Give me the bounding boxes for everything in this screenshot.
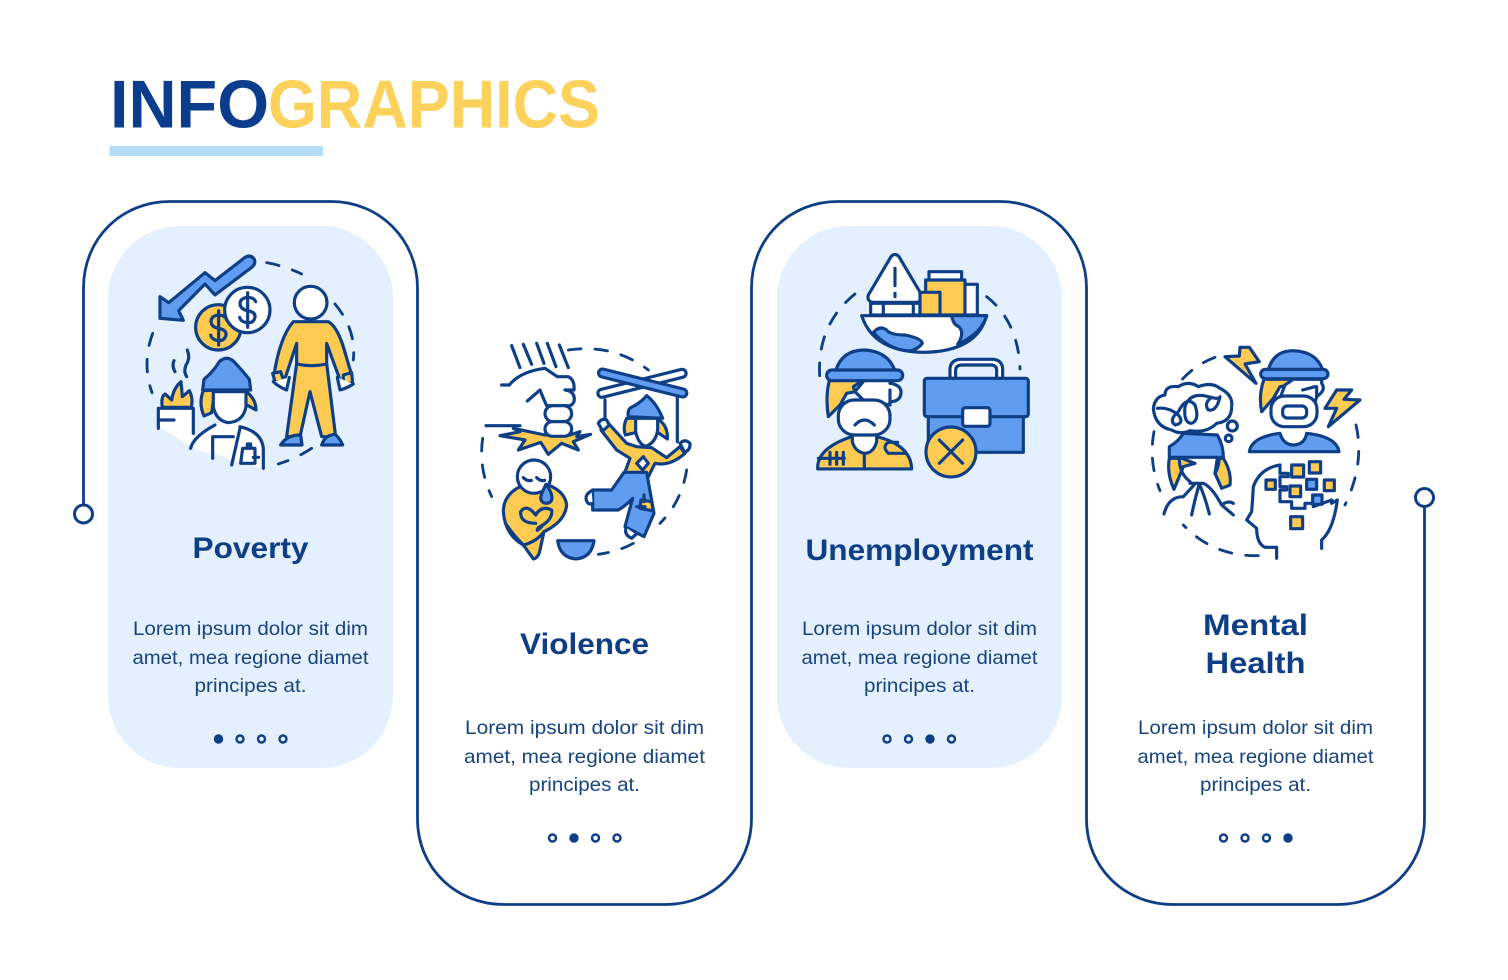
falling arrow — [160, 256, 255, 320]
body text: mental health: principes at. — [1200, 774, 1311, 796]
title: INFO — [110, 66, 269, 142]
person holding head — [1164, 433, 1233, 515]
title underline — [110, 146, 323, 156]
body text: poverty — [132, 618, 369, 697]
person with empty pockets — [273, 286, 353, 445]
burning barrel — [158, 350, 240, 460]
heading: mental health — [1203, 609, 1308, 680]
screaming man — [1249, 351, 1339, 452]
body text: violence — [464, 717, 706, 796]
warning sign — [868, 254, 922, 315]
bowl — [558, 541, 594, 559]
buildings — [920, 272, 977, 315]
icon: unemployment — [818, 254, 1028, 477]
crying child — [503, 460, 567, 559]
briefcase — [924, 359, 1028, 452]
heading: unemployment: Unemployment — [806, 534, 1034, 567]
pagination dots: mental health — [1220, 834, 1292, 842]
panel: unemployment background — [777, 226, 1062, 768]
pagination dots: violence — [549, 834, 620, 842]
body text: violence: principes at. — [529, 774, 640, 796]
tangled thought cloud — [1153, 383, 1237, 442]
connecting frame outline — [74, 202, 1434, 904]
body text: violence: Lorem ipsum dolor sit dim — [465, 717, 704, 739]
body text: violence: amet, mea regione diamet — [464, 746, 706, 768]
pagination dots: poverty — [215, 736, 286, 742]
globe half — [862, 316, 987, 352]
fist striking the ground — [486, 343, 591, 454]
icon: poverty — [147, 256, 354, 468]
icon: violence — [482, 343, 690, 559]
lightning bolts — [1225, 347, 1360, 427]
pagination dots: unemployment — [884, 736, 955, 742]
panel: poverty background — [108, 226, 393, 768]
body text: unemployment: Lorem ipsum dolor sit dim — [802, 618, 1037, 640]
dashed circle — [482, 349, 687, 554]
heading: mental health: Health — [1206, 647, 1306, 680]
title — [110, 66, 600, 142]
body text: unemployment: principes at. — [864, 675, 975, 697]
body text: unemployment: amet, mea regione diamet — [802, 647, 1038, 669]
homeless person — [191, 358, 263, 468]
coins — [196, 287, 270, 350]
heading: violence: Violence — [520, 628, 649, 661]
body text: poverty: Lorem ipsum dolor sit dim — [133, 618, 368, 640]
body text: poverty: amet, mea regione diamet — [132, 647, 369, 669]
puppet — [586, 368, 690, 538]
heading: mental health: Mental — [1203, 609, 1308, 642]
body text: mental health: Lorem ipsum dolor sit dim — [1138, 717, 1373, 739]
title: GRAPHICS — [268, 66, 600, 142]
cross badge — [926, 427, 976, 477]
body text: unemployment — [802, 618, 1038, 697]
sad man — [818, 350, 912, 469]
icon: mental health — [1152, 347, 1360, 558]
body text: poverty: principes at. — [194, 675, 306, 697]
body text: mental health — [1138, 717, 1374, 796]
dashed arc — [819, 287, 1020, 376]
head with pixels — [1247, 462, 1337, 558]
body text: mental health: amet, mea regione diamet — [1138, 746, 1374, 768]
dashed circle — [1152, 357, 1359, 556]
dashed circle — [147, 263, 354, 464]
heading: poverty: Poverty — [192, 532, 309, 565]
